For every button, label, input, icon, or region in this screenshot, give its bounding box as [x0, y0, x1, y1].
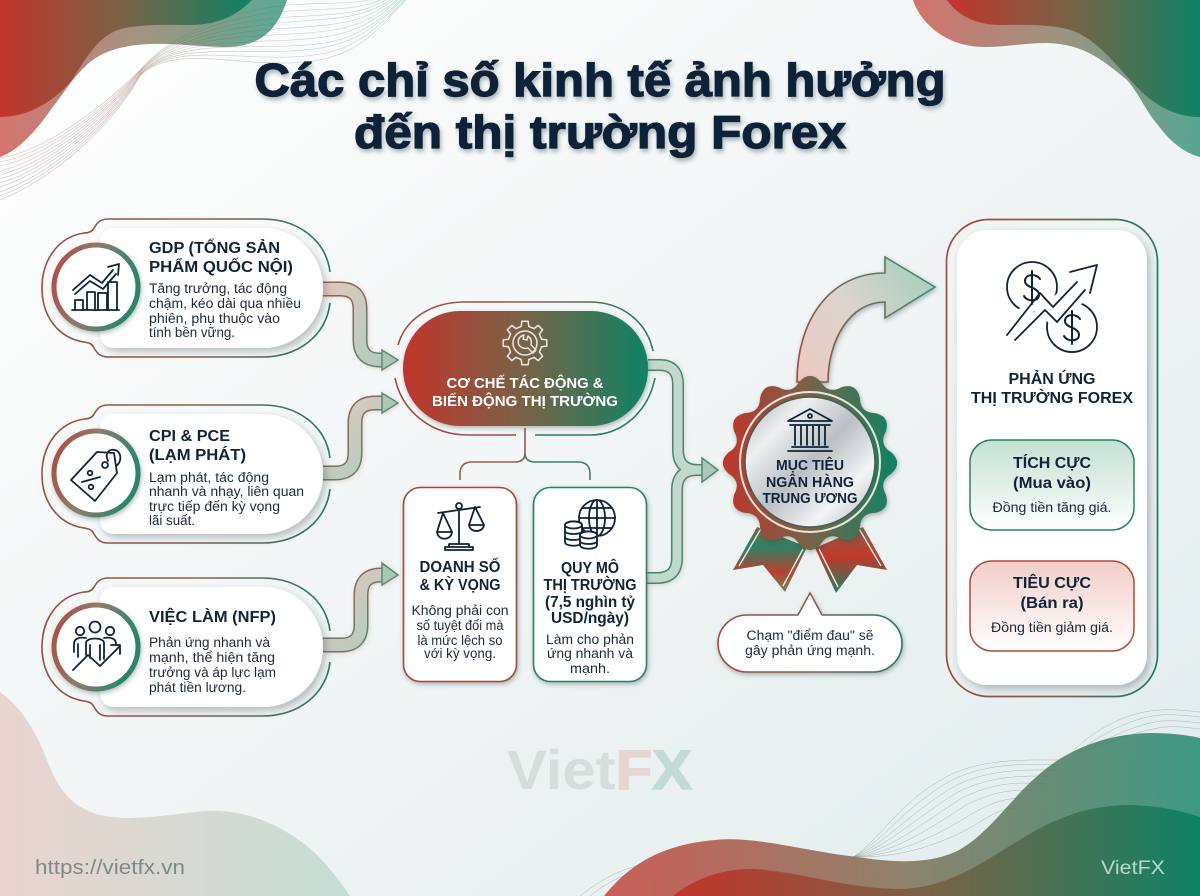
- icon: gear and wrench: [503, 321, 547, 365]
- text: GDP description: phiên, phụ thuộc vào: [149, 311, 280, 326]
- heading: positive: TÍCH CỰC: [1013, 453, 1091, 472]
- ring: GDP icon: [54, 245, 138, 329]
- heading: market size: [544, 559, 636, 627]
- heading: sales and expectations: DOANH SỐ: [420, 558, 500, 576]
- ring: badge border: [740, 392, 880, 532]
- text: mechanism label: [432, 374, 618, 410]
- text: sell: (Bán ra): [1020, 595, 1084, 612]
- arrow: GDP to mechanism: [321, 289, 398, 370]
- text: CPI description: lãi suất.: [149, 513, 195, 528]
- text: NFP description: trưởng và áp lực lạm: [149, 665, 276, 680]
- card: GDP: [42, 219, 330, 357]
- badge: scalloped seal: [723, 376, 897, 550]
- ribbon: left: [733, 527, 807, 592]
- heading: CPI: (LẠM PHÁT): [149, 447, 246, 464]
- text: mechanism label: BIẾN ĐỘNG THỊ TRƯỜNG: [432, 392, 618, 410]
- text: sales description: với kỳ vọng.: [424, 646, 496, 661]
- text: callout message: gây phản ứng mạnh.: [745, 643, 875, 658]
- footer: brand: VietFX: [1101, 858, 1165, 879]
- connector: mechanism to boxes: [460, 428, 590, 480]
- icon: people and growth: [73, 622, 120, 670]
- text: currency up: Đồng tiền tăng giá.: [992, 500, 1112, 515]
- text: CPI description: [149, 470, 304, 528]
- text: CPI description: trực tiếp đến kỳ vọng: [149, 499, 280, 514]
- text: market size description: mạnh.: [570, 661, 610, 676]
- card: NFP: [42, 578, 330, 716]
- text: CPI description: Lạm phát, tác động: [149, 470, 269, 485]
- text: central bank label: MỤC TIÊU: [776, 456, 844, 474]
- footer: website: https://vietfx.vn: [35, 857, 185, 879]
- medal: central bank: [723, 376, 897, 593]
- text: callout message: Chạm "điểm đau" sẽ: [746, 628, 874, 643]
- icon: bank: [788, 409, 832, 451]
- heading: forex reaction: THỊ TRƯỜNG FOREX: [971, 389, 1134, 407]
- heading: sales and expectations: [420, 558, 500, 594]
- box: market size: [534, 488, 646, 682]
- heading: negative: TIÊU CỰC: [1013, 573, 1091, 592]
- heading: NFP: VIỆC LÀM (NFP): [149, 608, 276, 626]
- icon: coins and rising arrow: [1007, 262, 1097, 352]
- disc: silver: [745, 397, 875, 527]
- text: market size description: [546, 632, 634, 676]
- heading: GDP: PHẨM QUỐC NỘI): [149, 258, 293, 276]
- decoration: bottom-left blob: [0, 692, 350, 896]
- text: sales description: là mức lệch so: [418, 633, 502, 648]
- card: CPI & PCE: [42, 405, 330, 543]
- heading: market size: (7,5 nghìn tỷ: [545, 594, 635, 611]
- text: central bank label: NGÂN HÀNG: [766, 473, 854, 491]
- text: GDP description: chậm, kéo dài qua nhiều: [149, 296, 301, 311]
- text: GDP description: Tăng trưởng, tác động: [149, 281, 287, 296]
- text: GDP description: [149, 281, 301, 340]
- ribbon: right: [815, 527, 887, 593]
- icon: globe and coins: [565, 500, 615, 549]
- arrow: NFP to sales box: [321, 563, 398, 645]
- decoration: top-left waves: [0, 0, 410, 200]
- text: CPI description: nhanh và nhạy, liên quan: [149, 484, 304, 499]
- ring: CPI icon: [54, 431, 138, 515]
- text: buy: (Mua vào): [1013, 475, 1091, 492]
- box: negative: [970, 561, 1134, 651]
- arrow: central bank to forex reaction: [797, 257, 935, 382]
- text: sales description: [412, 603, 508, 661]
- heading: market size: QUY MÔ: [561, 559, 619, 577]
- text: central bank label: [762, 456, 858, 507]
- title: đến thị trường Forex: [354, 106, 846, 158]
- decoration: bottom-right waves: [580, 710, 1200, 896]
- icon: growth chart: [72, 264, 119, 310]
- text: GDP description: tính bền vững.: [149, 325, 235, 340]
- panel: mechanism: [395, 302, 655, 435]
- heading: GDP: GDP (TỔNG SẢN: [149, 239, 280, 257]
- panel: forex reaction: [946, 220, 1158, 696]
- outline: forex panel: [946, 220, 1158, 696]
- callout: pain point: [718, 593, 902, 672]
- heading: forex reaction: PHẢN ỨNG: [1008, 370, 1096, 388]
- box: positive: [970, 440, 1134, 530]
- text: NFP description: mạnh, thể hiện tăng: [149, 650, 275, 665]
- text: sales description: Không phải con: [412, 603, 508, 618]
- text: NFP description: [149, 635, 276, 695]
- box: sales and expectations: [404, 488, 516, 682]
- ring: NFP icon: [54, 605, 138, 689]
- heading: sales and expectations: & KỲ VỌNG: [420, 576, 500, 594]
- text: market size description: Làm cho phản: [546, 632, 634, 647]
- text: market size description: ứng nhanh và: [547, 646, 634, 661]
- icon: price tag: [71, 450, 120, 501]
- text: central bank label: TRUNG ƯƠNG: [762, 491, 858, 507]
- text: callout message: [745, 628, 875, 658]
- heading: CPI: [149, 428, 246, 464]
- text: NFP description: phát tiền lương.: [149, 680, 246, 695]
- icon: scales: [437, 503, 484, 550]
- heading: market size: USD/ngày): [551, 610, 629, 627]
- outline: mechanism: [395, 302, 655, 435]
- text: NFP description: Phản ứng nhanh và: [149, 635, 270, 650]
- card: forex panel: [957, 230, 1147, 685]
- heading: market size: THỊ TRƯỜNG: [544, 576, 636, 594]
- watermark: VietFX: VietFX: [507, 738, 692, 801]
- heading: CPI: CPI & PCE: [149, 428, 230, 445]
- title: [254, 54, 946, 158]
- decoration: top-right waves: [913, 0, 1200, 157]
- heading: GDP: [149, 239, 293, 276]
- text: sales description: số tuyệt đối mà: [416, 618, 504, 633]
- heading: forex reaction: [971, 370, 1134, 407]
- arrow: CPI to mechanism: [321, 393, 398, 473]
- title: Các chỉ số kinh tế ảnh hưởng: [254, 54, 946, 106]
- text: mechanism label: CƠ CHẾ TÁC ĐỘNG &: [446, 374, 604, 392]
- text: currency down: Đồng tiền giảm giá.: [991, 620, 1113, 635]
- arrows: mechanism and market size to central bank: [645, 365, 718, 578]
- pill: mechanism: [403, 311, 648, 426]
